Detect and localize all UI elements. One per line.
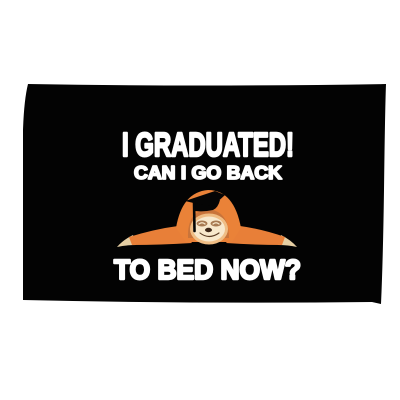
sloth arms (129, 226, 285, 245)
heading: to bed now: TO BED NOW? (114, 254, 301, 285)
sloth claws (117, 235, 297, 247)
sloth face (190, 214, 228, 244)
sloth face mask (193, 216, 225, 242)
sloth eye band (196, 220, 222, 226)
heading: I graduated: I GRADUATED! (122, 126, 294, 164)
heading: can I go back: CAN I GO BACK (134, 163, 282, 183)
illustration: sloth with graduation cap (117, 190, 297, 247)
black towel (23, 84, 386, 304)
sloth eyes (199, 223, 219, 224)
graduation cap (185, 191, 225, 231)
sloth inner arch (188, 209, 229, 238)
sloth nose (205, 228, 212, 232)
sloth smile (200, 233, 219, 236)
sloth body (176, 190, 241, 242)
